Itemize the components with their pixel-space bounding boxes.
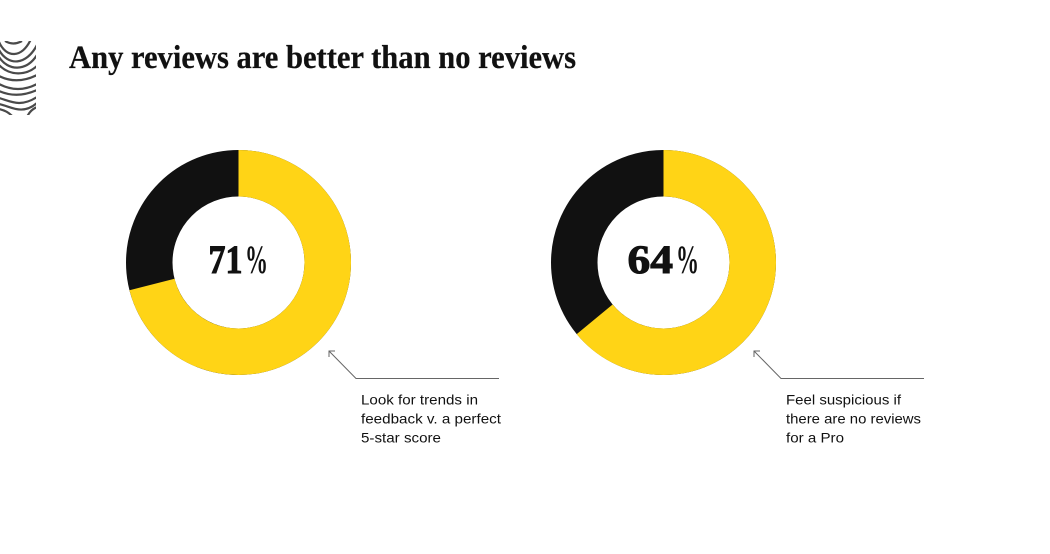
callout text: 71%: Look for trends in — [361, 392, 478, 408]
value: 64% — [628, 237, 699, 282]
donut chart: 64% — [574, 173, 753, 352]
value: 71%: 71 — [208, 237, 242, 282]
title: Any reviews are better than no reviews — [69, 40, 576, 76]
value: 71% — [208, 237, 268, 282]
callout text: 71% — [361, 392, 501, 446]
callout text: 64%: Feel suspicious if — [786, 392, 901, 408]
callout text: 64% — [786, 392, 921, 446]
arrow: callout leader for 64% — [754, 351, 924, 378]
callout text: 64%: for a Pro — [786, 430, 844, 446]
callout text: 71%: 5-star score — [361, 430, 441, 446]
arrow: callout leader for 71% — [329, 351, 499, 378]
value: 64%: 64 — [628, 237, 673, 282]
callout text: 64%: there are no reviews — [786, 410, 921, 426]
icon: wavy line pattern — [0, 39, 37, 117]
donut chart: 71% — [149, 173, 328, 352]
value: 64%: % — [676, 237, 699, 282]
value: 71%: % — [245, 237, 268, 282]
callout text: 71%: feedback v. a perfect — [361, 410, 501, 426]
